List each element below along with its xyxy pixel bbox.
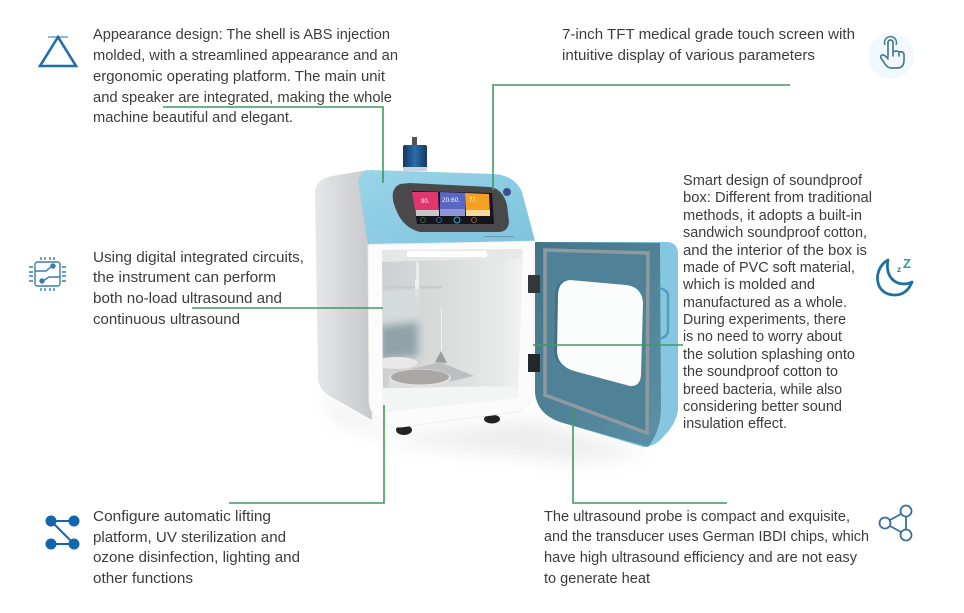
text block: touch screen: intuitive display of various parameters (562, 48, 815, 64)
text block: digital circuits: Using digital integrated circuits, (93, 250, 304, 266)
door hinges (528, 275, 540, 372)
icon: moon with z letters: z (897, 265, 901, 274)
text block: ultrasound probe: have high ultrasound efficiency and are not easy (544, 550, 858, 566)
text block: appearance design: Appearance design: The shell is ABS injection (93, 27, 390, 43)
text block: appearance design: molded, with a streamlined appearance and an (93, 48, 398, 64)
product illustration: ultrasonic instrument (315, 137, 678, 462)
icon: circuit chip (29, 257, 66, 291)
text block: touch screen: 7-inch TFT medical grade touch screen with (562, 27, 855, 43)
text block: ultrasound probe: to generate heat (544, 571, 650, 587)
text block: soundproof box: considering better sound (683, 399, 842, 415)
lifting platform (411, 362, 474, 382)
icon: moon with z letters (878, 256, 912, 295)
text block: appearance design (93, 27, 398, 126)
side housing (315, 170, 372, 420)
icon: share nodes (880, 506, 912, 540)
text block: automatic lifting platform (93, 509, 300, 587)
icon: connected nodes (46, 516, 78, 548)
text block: soundproof box: and the interior of the box is (683, 243, 867, 259)
text block: soundproof box: manufactured as a whole. (683, 295, 847, 311)
icon: touch hand (868, 33, 914, 79)
text block: appearance design: machine beautiful and elegant. (93, 110, 293, 126)
blue top panel (358, 170, 535, 244)
text block: automatic lifting platform: platform, UV sterilization and (93, 530, 286, 546)
text block: ultrasound probe (544, 509, 869, 587)
power button (503, 188, 511, 196)
text block: soundproof box: sandwich soundproof cotton, (683, 225, 867, 241)
probe on top (403, 137, 427, 171)
text block: automatic lifting platform: ozone disinfection, lighting and (93, 550, 300, 566)
text block: touch screen (562, 27, 855, 64)
text block: digital circuits: the instrument can perform (93, 270, 276, 286)
text block: ultrasound probe: and the transducer uses German IBDI chips, which (544, 529, 869, 545)
text block: soundproof box: which is molded and (682, 277, 815, 293)
text block: automatic lifting platform: Configure automatic lifting (93, 509, 271, 525)
beaker (383, 289, 419, 324)
control panel with touch screen (393, 183, 509, 232)
floor shadow (322, 395, 650, 462)
text block: soundproof box: Smart design of soundproof (683, 173, 863, 189)
white front frame (368, 241, 534, 427)
door (535, 242, 678, 447)
door handle (659, 288, 668, 339)
text block: soundproof box: the soundproof cotton to (683, 364, 838, 380)
control panel with touch screen: 77. (469, 198, 478, 204)
text block: soundproof box: insulation effect. (683, 416, 787, 432)
text block: soundproof box: breed bacteria, while also (683, 382, 842, 398)
text block: appearance design: and speaker are integrated, making the whole (93, 90, 392, 106)
icon: moon with z letters: Z (903, 256, 911, 271)
light bar (407, 251, 486, 257)
text block: digital circuits: continuous ultrasound (93, 312, 240, 328)
lifting rods and clamp (376, 262, 474, 388)
text block: soundproof box: is no need to worry about (683, 329, 842, 345)
model label strip (484, 236, 514, 237)
text block: soundproof box: During experiments, there (683, 312, 846, 328)
callout leader lines (163, 85, 790, 503)
control panel with touch screen: 90. (421, 199, 430, 205)
text block: soundproof box: methods, it adopts a built-in (683, 208, 862, 224)
text block: digital circuits: both no-load ultrasound and (93, 291, 282, 307)
text block: soundproof box: box: Different from traditional (683, 190, 872, 206)
text block: automatic lifting platform: other functions (93, 571, 193, 587)
text block: soundproof box (682, 173, 872, 432)
feet (396, 414, 500, 435)
text block: soundproof box: the solution splashing onto (683, 347, 855, 363)
text block: ultrasound probe: The ultrasound probe is compact and exquisite, (544, 509, 850, 525)
interior cavity (376, 249, 523, 412)
text block: digital circuits (93, 250, 304, 328)
icon: triangle (40, 37, 76, 66)
text block: soundproof box: made of PVC soft material, (683, 260, 855, 276)
control panel with touch screen: 20.60. (442, 197, 460, 204)
text block: appearance design: ergonomic operating platform. The main unit (93, 69, 385, 85)
